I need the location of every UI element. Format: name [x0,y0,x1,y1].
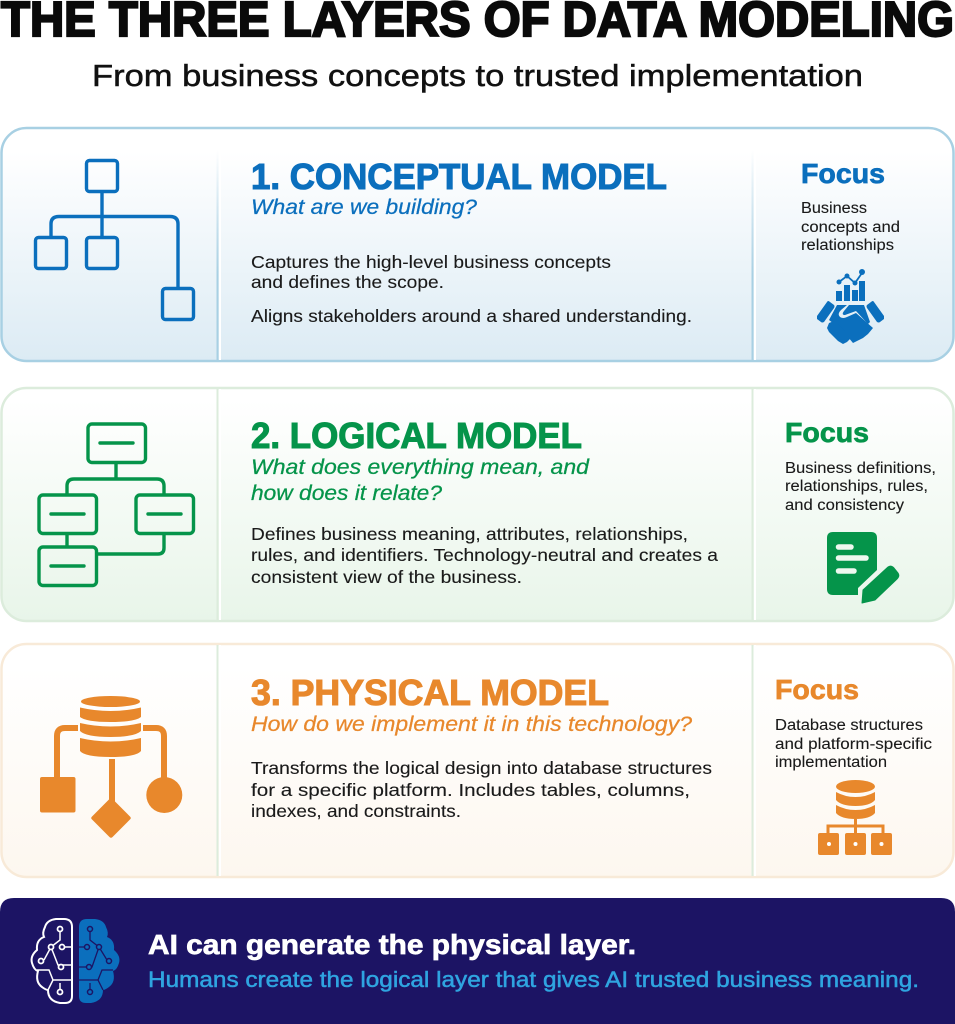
description: consistent view of the business. [251,567,522,587]
panel: physical model [2,644,954,877]
focus text: and consistency [785,497,904,514]
description: and defines the scope. [251,272,444,292]
icon: handshake with chart [817,269,884,344]
question: How do we implement it in this technology? [251,712,692,736]
focus text: implementation [775,754,887,771]
banner subline: Humans create the logical layer that gives AI trusted business meaning. [148,967,919,992]
description: indexes, and constraints. [251,801,461,821]
icon: brain [32,919,119,1003]
panel: logical model [2,388,954,621]
panel: conceptual model [2,128,954,361]
focus text: relationships [801,237,894,254]
focus text: concepts and [801,219,900,236]
question [251,455,590,505]
focus heading: Focus [801,158,885,189]
question: how does it relate? [251,481,442,505]
icon: entity diagram [39,424,194,586]
heading: 1. CONCEPTUAL MODEL [251,156,667,197]
focus text: Business definitions, [785,460,936,477]
focus text: relationships, rules, [785,478,928,495]
focus text: Business [801,200,867,217]
question: What are we building? [251,195,477,219]
description: Aligns stakeholders around a shared understanding. [251,306,692,326]
subtitle: From business concepts to trusted implementation [92,58,863,93]
focus text [801,200,900,254]
icon: document with pen [827,532,899,603]
banner [0,898,955,1024]
focus text [785,460,936,514]
description [251,524,718,587]
icon: database schema [40,696,182,839]
focus text [775,717,932,771]
banner headline: AI can generate the physical layer. [148,929,636,960]
heading: 2. LOGICAL MODEL [251,415,582,456]
icon: hierarchy [36,160,194,320]
heading: 3. PHYSICAL MODEL [251,672,609,713]
focus text: and platform-specific [775,736,932,753]
description [251,758,712,821]
description [251,252,692,326]
focus heading: Focus [775,674,859,705]
description: rules, and identifiers. Technology-neutral and creates a [251,545,718,565]
focus heading: Focus [785,417,869,448]
description: for a specific platform. Includes tables, columns, [251,780,690,800]
description: Transforms the logical design into database structures [251,758,712,778]
question: What does everything mean, and [251,455,590,479]
focus text: Database structures [775,717,923,734]
description: Captures the high-level business concepts [251,252,611,272]
description: Defines business meaning, attributes, relationships, [251,524,688,544]
icon: database with tables [818,780,892,855]
